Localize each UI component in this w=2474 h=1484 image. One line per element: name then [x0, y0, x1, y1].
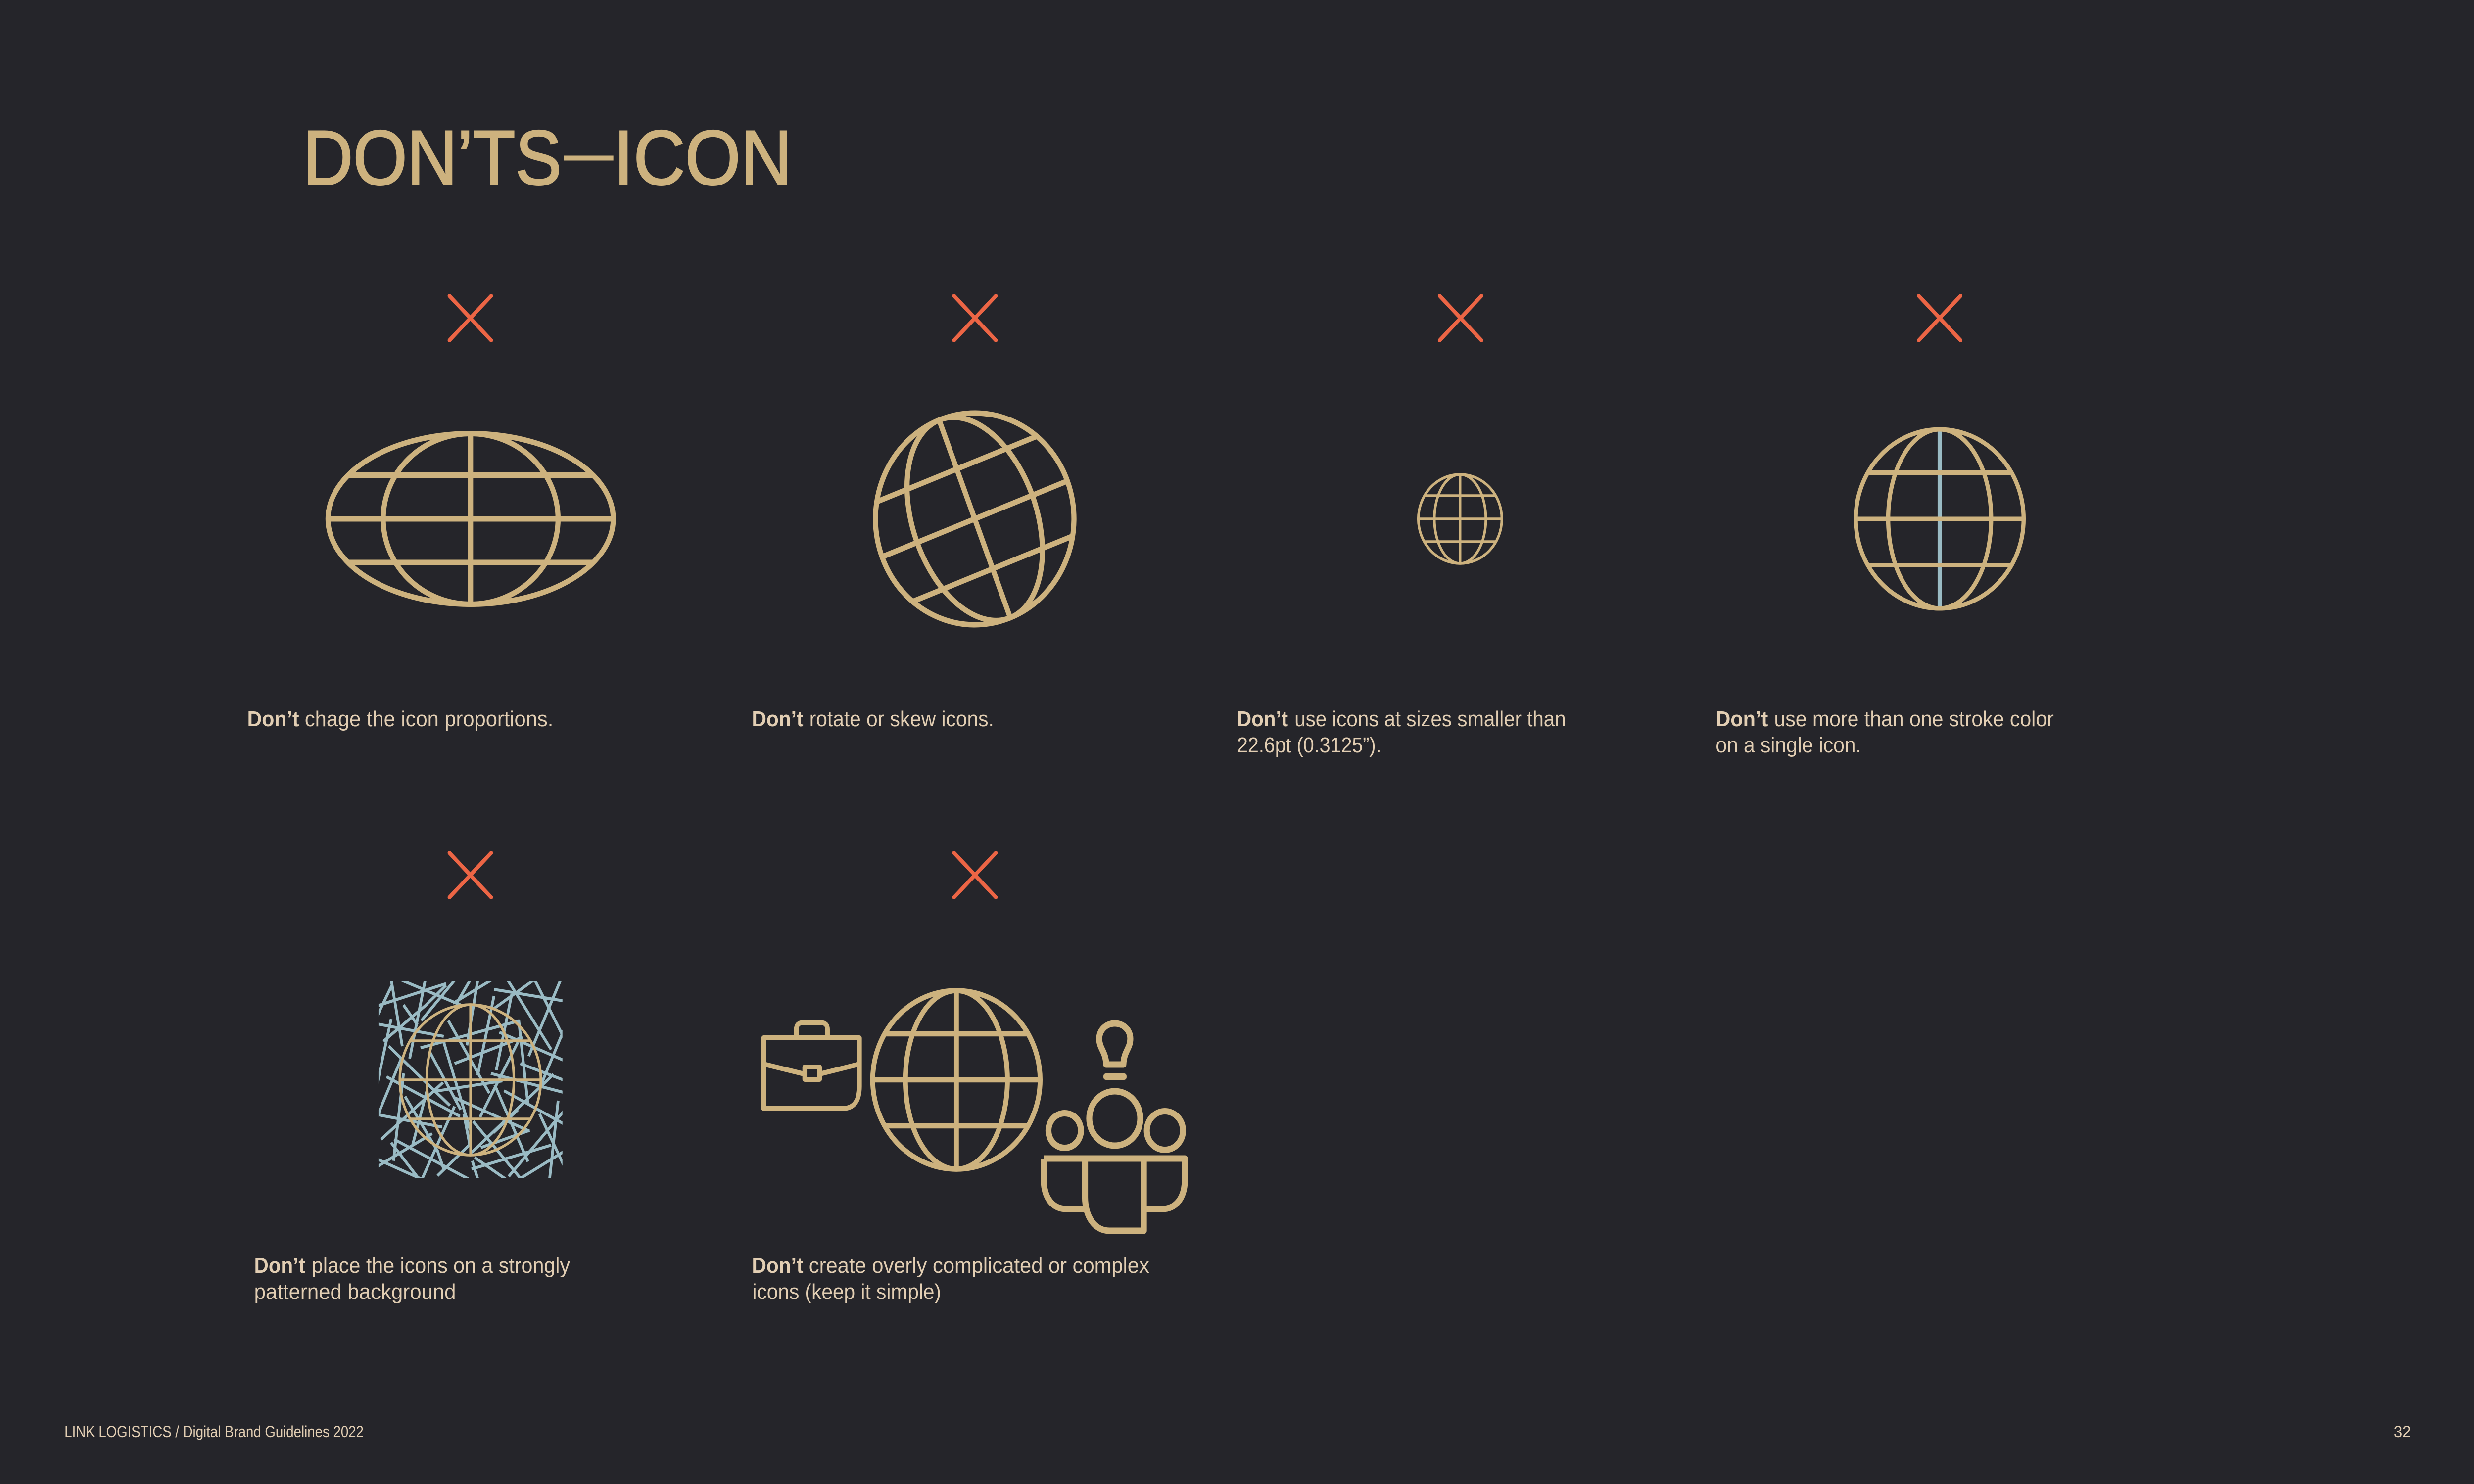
caption: create overly complicated or complex — [809, 1253, 1149, 1278]
icon: rotated globe — [847, 382, 1103, 655]
caption: chage the icon proportions. — [305, 707, 553, 731]
caption: Don’t — [1715, 707, 1768, 731]
panel: complex icons — [752, 853, 1185, 1304]
icon: red cross — [449, 853, 491, 897]
icon: red cross — [1919, 296, 1960, 340]
caption — [752, 1253, 1149, 1304]
icon: red cross — [954, 296, 996, 340]
caption: place the icons on a strongly — [312, 1253, 571, 1278]
caption: 22.6pt (0.3125”). — [1237, 733, 1381, 757]
icon: stretched globe — [328, 433, 613, 604]
icon: lightbulb — [1099, 1023, 1130, 1080]
caption: Don’t — [752, 707, 804, 731]
title: — — [565, 125, 613, 183]
panel: patterned background — [254, 853, 571, 1304]
caption: Don’t — [1237, 707, 1288, 731]
caption: use more than one stroke color — [1774, 707, 2054, 731]
icon: small globe — [1419, 474, 1502, 563]
pattern: scattered blue lines — [377, 979, 564, 1179]
icon: large globe — [872, 990, 1041, 1169]
caption: use icons at sizes smaller than — [1294, 707, 1566, 731]
title: DON’TS — [303, 115, 562, 201]
caption — [254, 1253, 571, 1304]
title — [303, 115, 792, 201]
icon: team of people — [1044, 1091, 1185, 1231]
footer: document title: LINK LOGISTICS / Digital Brand Guidelines 2022 — [64, 1423, 364, 1440]
icon: red cross — [954, 853, 996, 897]
caption: icons (keep it simple) — [752, 1280, 941, 1304]
caption: patterned background — [254, 1280, 456, 1304]
caption — [1715, 707, 2054, 757]
caption: Don’t — [247, 707, 299, 731]
icon: red cross — [449, 296, 491, 340]
icon: briefcase — [763, 1023, 859, 1109]
icon: two-colour globe — [1856, 429, 2024, 608]
footer: page number: 32 — [2394, 1423, 2411, 1440]
panel: rotation — [752, 296, 1103, 731]
panel: stroke colour — [1715, 296, 2054, 757]
icon: globe on pattern — [400, 1005, 541, 1155]
title: ICON — [614, 115, 792, 201]
caption — [1237, 707, 1566, 757]
caption: rotate or skew icons. — [809, 707, 994, 731]
icon: red cross — [1440, 296, 1481, 340]
panel: proportions — [247, 296, 613, 731]
caption: Don’t — [752, 1253, 804, 1278]
caption: Don’t — [254, 1253, 305, 1278]
caption: on a single icon. — [1715, 733, 1861, 757]
panel: minimum size — [1237, 296, 1566, 757]
